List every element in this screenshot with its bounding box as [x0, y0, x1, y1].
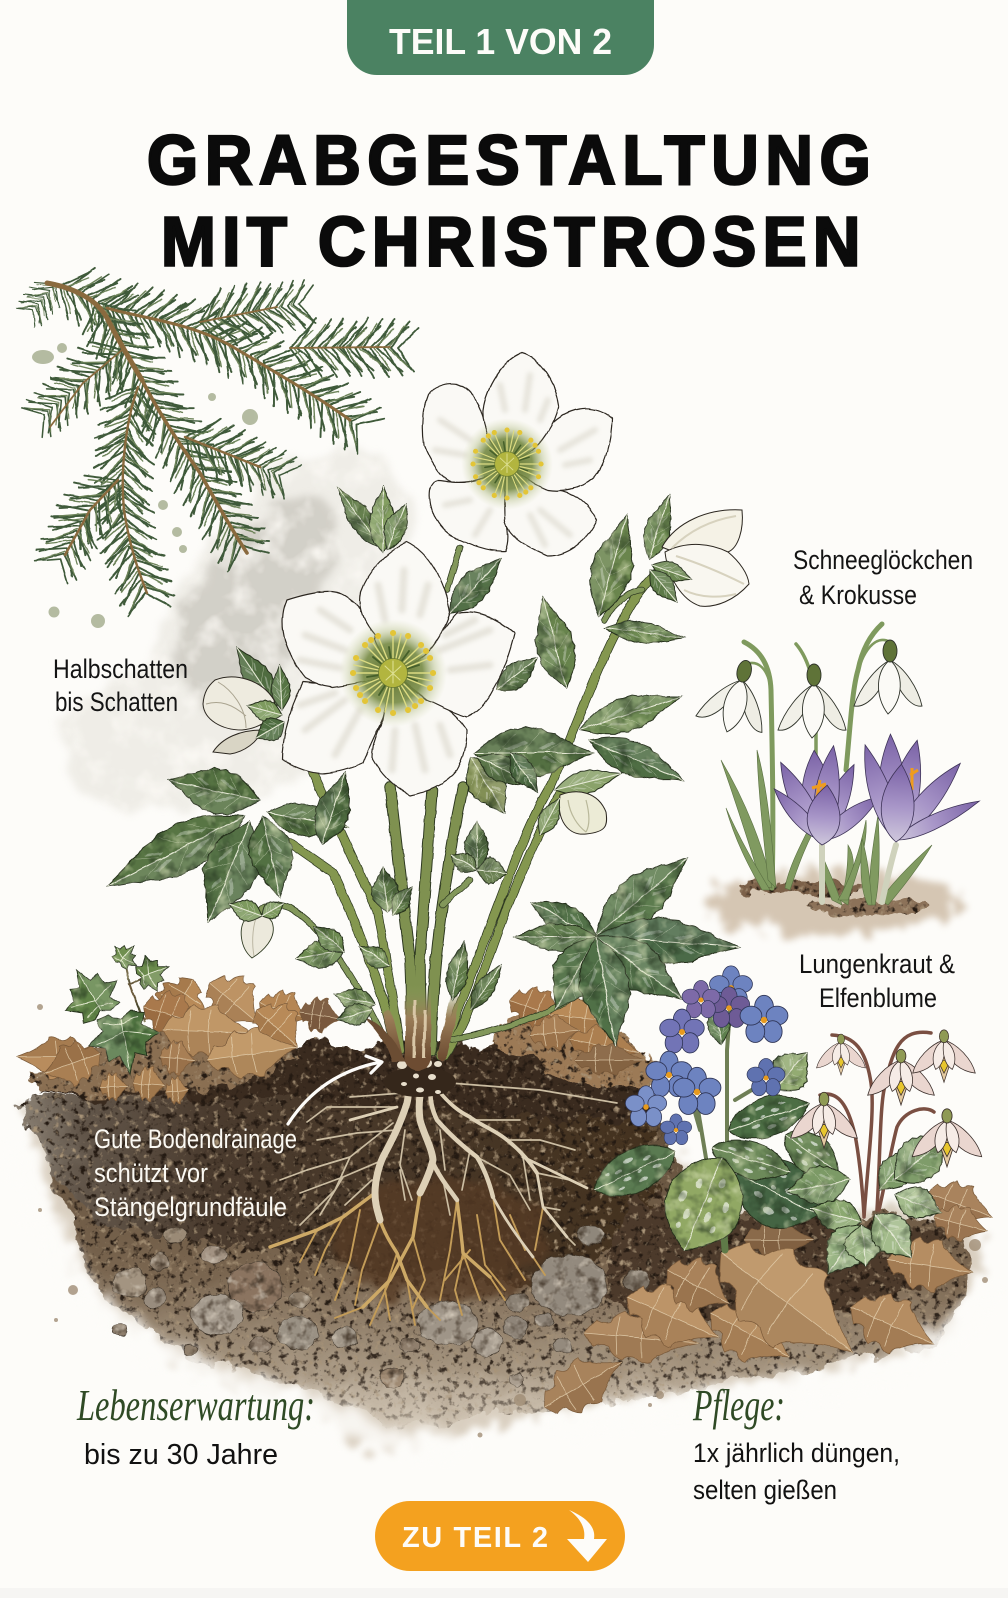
label: Schneeglöckchen und Krokusse: & Krokusse: [799, 580, 917, 610]
badge: Teil 1 von 2: TEIL 1 VON 2: [389, 21, 612, 62]
fir branch: [12, 258, 418, 622]
text: care instructions: selten gießen: [693, 1475, 837, 1505]
shade wash: [32, 343, 410, 815]
pale side roots: [280, 1083, 617, 1245]
label: Lungenkraut und Elfenblume: [799, 949, 955, 1013]
calyx above large flower: [328, 481, 416, 554]
title: MIT CHRISTROSEN: [161, 204, 860, 281]
golden primary roots: [270, 1193, 490, 1307]
text: bis zu 30 Jahre: bis zu 30 Jahre: [84, 1439, 278, 1471]
stamens: [339, 619, 447, 727]
icon: down arrow: [567, 1510, 607, 1562]
lungwort leaves: [584, 1002, 849, 1265]
grass blades: [721, 750, 932, 905]
right palmate leaf: [514, 840, 740, 1050]
fir twigs: [47, 283, 390, 593]
companion: elf flowers: [783, 1030, 982, 1286]
fir needles: [12, 258, 418, 622]
label: Schneeglöckchen und Krokusse: Schneeglöckchen: [793, 545, 973, 575]
callout: soil drainage: [94, 1124, 297, 1222]
stamens: [461, 418, 553, 510]
leaves around crown: [293, 822, 509, 1030]
label: Schneeglöckchen und Krokusse: [793, 545, 973, 610]
snowdrop flowers: [694, 640, 922, 740]
title: [147, 122, 871, 281]
roots: [270, 1057, 617, 1325]
litter bed left: [25, 1030, 300, 1095]
text: care instructions: 1x jährlich düngen,: [693, 1438, 900, 1468]
label: Lungenkraut und Elfenblume: Lungenkraut &: [799, 949, 955, 979]
callout: soil drainage: Gute Bodendrainage: [94, 1124, 297, 1154]
ivy sprig: [50, 936, 175, 1081]
petal shading: [300, 570, 490, 770]
bud: left of large flower: [203, 640, 292, 754]
upper stem leaves: [439, 491, 691, 823]
crocus flower two: [854, 733, 982, 846]
bud: upper right: [642, 510, 749, 609]
soil cross-section: [20, 1010, 985, 1450]
left leaf cluster: [96, 759, 362, 933]
text: care instructions: [693, 1438, 900, 1505]
autumn leaf litter: upper right: [503, 979, 645, 1076]
hellebore leaves: [96, 481, 740, 1050]
label: Halbschatten bis Schatten: Halbschatten: [53, 654, 188, 684]
elf flower stems: [820, 1032, 934, 1217]
elf flower blossoms: [791, 1030, 982, 1167]
callout: soil drainage: Stängelgrundfäule: [94, 1192, 287, 1222]
root crown knot: [384, 1057, 456, 1097]
petal shading: [435, 375, 595, 545]
stones and pebbles: [113, 1225, 649, 1388]
label: Lungenkraut und Elfenblume: Elfenblume: [819, 983, 937, 1013]
lungwort flowers: [625, 966, 788, 1145]
title: GRABGESTALTUNG: [147, 122, 871, 199]
snowdrop stems and blades: [744, 624, 890, 888]
flower: large hellebore: [282, 542, 515, 795]
badge: Teil 1 von 2: [347, 0, 654, 75]
litter bed right: [490, 1010, 655, 1090]
flower: upper hellebore: [423, 353, 612, 556]
crown sheath: [388, 990, 455, 1058]
heading: Lebenserwartung: Lebenserwartung:: [76, 1381, 315, 1430]
lungwort stems: [690, 1010, 760, 1250]
elf flower leaves: [783, 1118, 963, 1286]
callout: soil drainage: schützt vor: [94, 1158, 208, 1188]
petals: [423, 353, 612, 556]
thick pale roots: [350, 1080, 587, 1257]
soil edge fade: [22, 1150, 985, 1446]
heading: Pflege: Pflege:: [692, 1381, 785, 1430]
label: Halbschatten bis Schatten: bis Schatten: [55, 687, 178, 717]
lower right soil: [600, 1195, 950, 1330]
companion: lungwort: [584, 966, 849, 1265]
crocus flower one: [768, 744, 884, 847]
petals: [282, 542, 515, 795]
gravel layer: [40, 1090, 975, 1430]
soil speckles: [37, 1004, 988, 1438]
autumn leaf litter: upper left: [17, 962, 345, 1106]
autumn leaf litter: lower right: [531, 1172, 1000, 1428]
soil outer fade: [28, 1080, 985, 1450]
dark soil layer: [20, 1070, 655, 1290]
fine golden roots: [300, 1197, 545, 1325]
companion soil mound: [702, 873, 962, 933]
crocus stems: [822, 845, 896, 902]
hellebore stems: [258, 547, 668, 1062]
bud: right greenish: [531, 762, 624, 839]
label: Halbschatten bis Schatten: [53, 654, 188, 717]
arrow: drainage to root crown: [288, 1056, 382, 1124]
topsoil layer: [40, 1040, 650, 1120]
warm root zone: [330, 1178, 550, 1302]
companion: snowdrops and crocuses: [694, 624, 982, 933]
button: zu Teil 2: ZU TEIL 2: [402, 1522, 548, 1554]
button: zu Teil 2: [375, 1501, 625, 1571]
bud: lower left stem: [225, 894, 288, 958]
